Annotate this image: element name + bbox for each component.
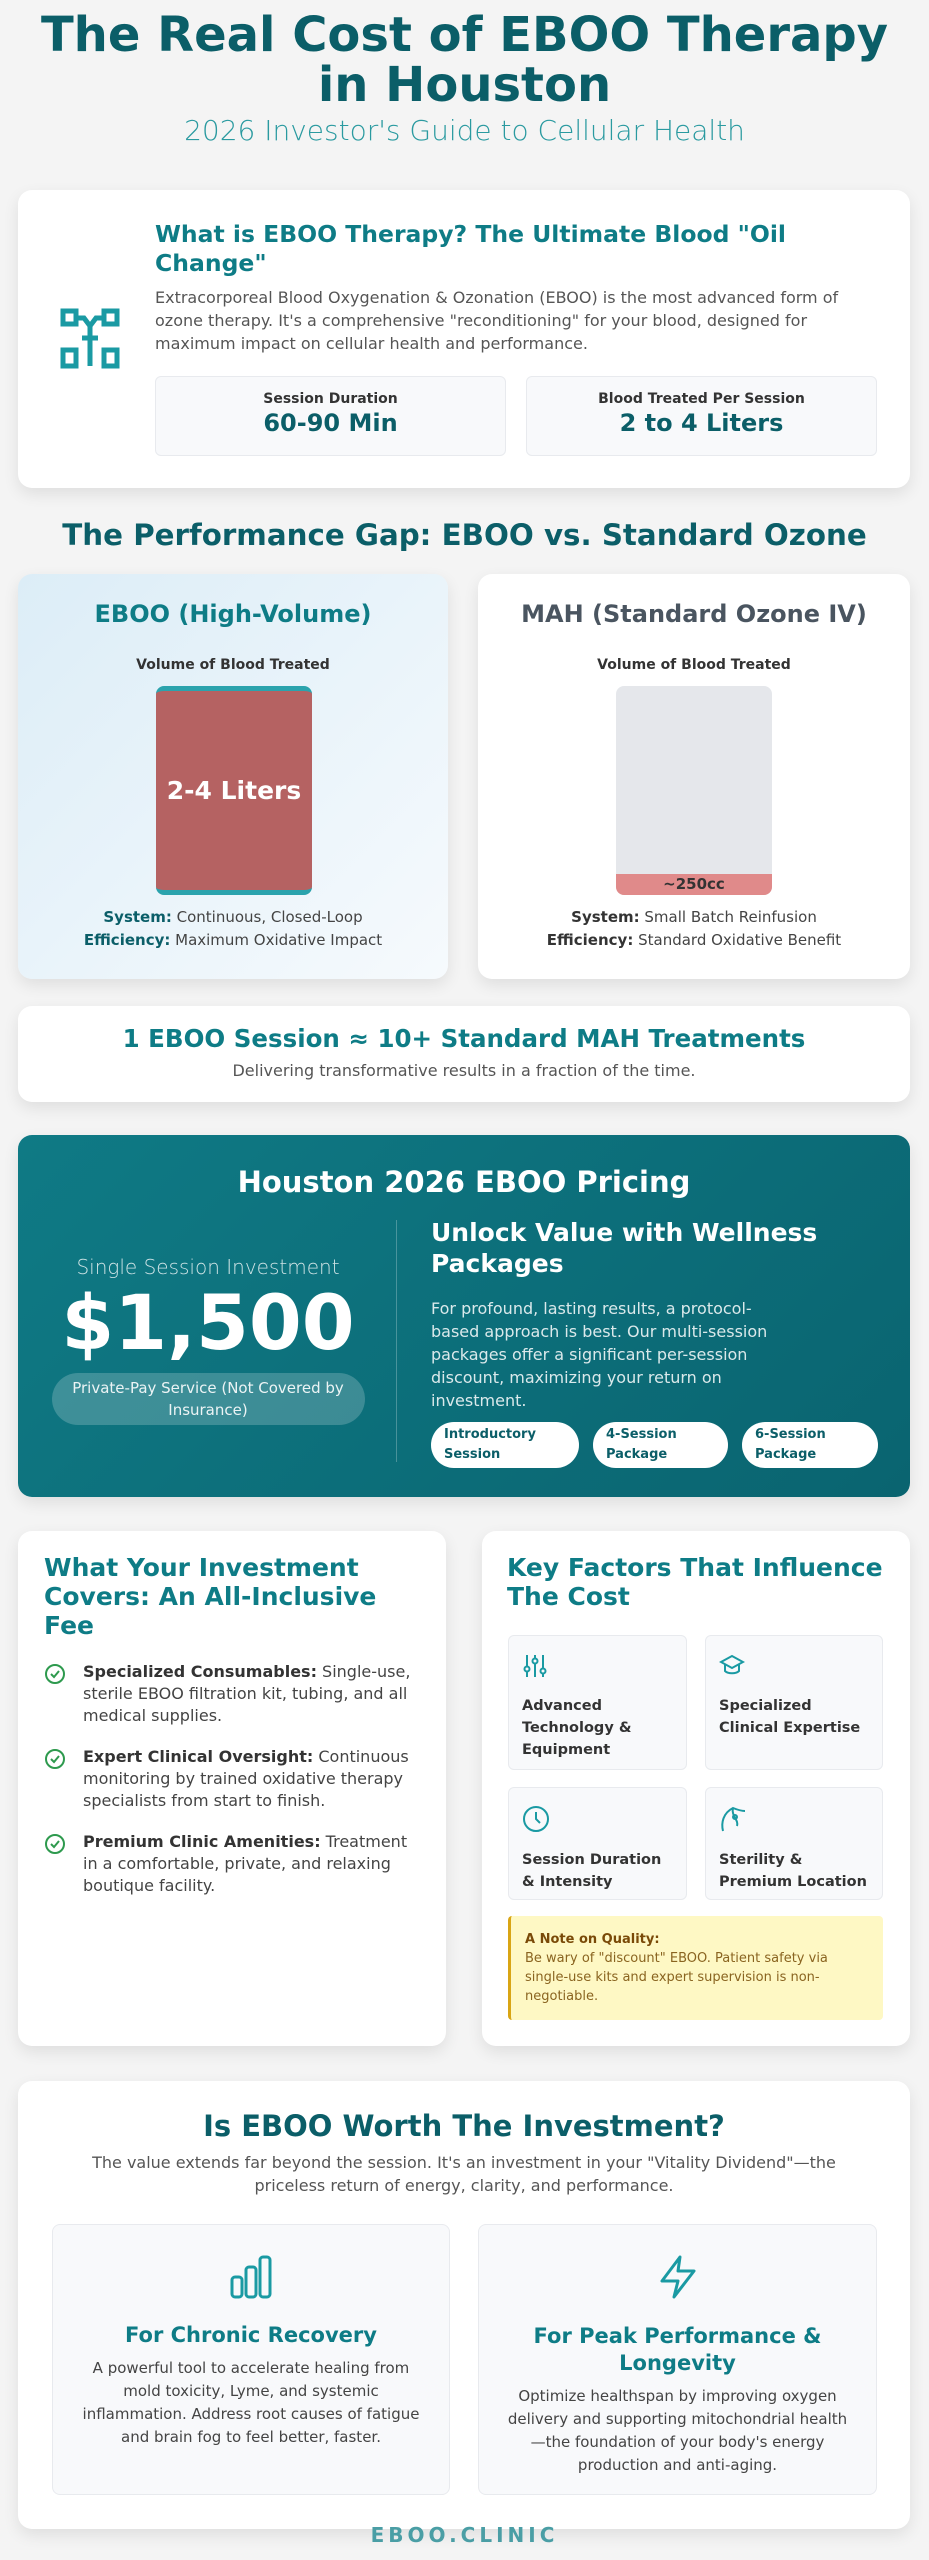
benefit: peak performance: Optimize healthspan by improving oxygen delivery and supporting mitochondrial health—the foundation of your body's energy production and anti-aging. (508, 2387, 847, 2474)
package buttons: Introductory (444, 1427, 536, 1442)
specs: Efficiency: Maximum Oxidative Impact (84, 931, 382, 949)
package buttons: Package (606, 1447, 667, 1462)
factor: technology (508, 1635, 687, 1770)
stat: duration: 60-90 Min (263, 409, 398, 437)
title (41, 7, 888, 113)
bar: 2-4 liters: 2-4 Liters (167, 776, 301, 805)
panel: worth the investment (18, 2081, 910, 2529)
heading: Is EBOO Worth The Investment? (203, 2109, 725, 2143)
factor: expertise: Specialized Clinical Expertise (719, 1698, 860, 1736)
package buttons (431, 1422, 878, 1468)
bar: 250cc (616, 686, 772, 895)
stat: duration (155, 376, 506, 456)
bar: 250cc: ~250cc (663, 875, 725, 893)
stat: duration: Session Duration (263, 391, 398, 407)
panel: key factors (482, 1531, 910, 2046)
panel: what is EBOO (18, 190, 910, 488)
bar: 2-4 liters (156, 686, 312, 895)
panel: investment covers (18, 1531, 446, 2046)
benefit: chronic recovery (52, 2224, 450, 2495)
footer brand: EBOO.CLINIC (371, 2523, 558, 2547)
package buttons: Package (755, 1447, 816, 1462)
benefit: peak performance (478, 2224, 877, 2495)
heading: What Your Investment Covers: An All-Inclusive Fee (44, 1553, 376, 1640)
callout: quality note: Be wary of "discount" EBOO. Patient safety via single-use kits and expert supervision is non-negotiable. (525, 1951, 828, 2004)
subtitle: 2026 Investor's Guide to Cellular Health (184, 114, 745, 147)
heading: Key Factors That Influence The Cost (507, 1553, 883, 1611)
icon: lightning (660, 2256, 696, 2298)
package buttons: 6-Session (755, 1427, 826, 1442)
packages (431, 1218, 878, 1468)
callout: 1 EBOO = 10 MAH: 1 EBOO Session ≈ 10+ Standard MAH Treatments (123, 1024, 805, 1053)
section heading: performance gap: The Performance Gap: EBOO vs. Standard Ozone (62, 518, 867, 552)
insurance pill: Private-Pay Service (Not Covered by Insurance) (72, 1379, 344, 1419)
specs (547, 908, 841, 949)
callout: 1 EBOO = 10 MAH (18, 1006, 910, 1102)
panel: EBOO comparison (18, 574, 448, 979)
stat: blood volume: Blood Treated Per Session (598, 391, 805, 407)
factor: expertise (705, 1635, 883, 1770)
insurance pill (52, 1373, 364, 1425)
price block (52, 1255, 365, 1425)
checklist (45, 1662, 410, 1895)
title: in Houston (318, 57, 611, 113)
item: consumables: Specialized Consumables: Single-use, sterile EBOO filtration kit, tubing, and all medical supplies. (83, 1662, 410, 1725)
specs: Efficiency: Standard Oxidative Benefit (547, 931, 841, 949)
icon: bar chart (230, 2256, 272, 2298)
benefit: peak performance: Longevity (619, 2351, 736, 2375)
description: Extracorporeal Blood Oxygenation & Ozonation (EBOO) is the most advanced form of ozone therapy. It's a comprehensive "reconditioning" for your blood, designed for maximum impact on cellular health and performance. (155, 288, 838, 353)
callout: 1 EBOO = 10 MAH: Delivering transformative results in a fraction of the time. (232, 1061, 696, 1080)
heading: Houston 2026 EBOO Pricing (238, 1165, 690, 1199)
title: The Real Cost of EBOO Therapy (41, 7, 888, 63)
factor: sterility (705, 1787, 883, 1900)
heading: What is EBOO Therapy? The Ultimate Blood "Oil Change" (155, 220, 786, 277)
panel: pricing (18, 1135, 910, 1497)
item: amenities: Premium Clinic Amenities: Treatment in a comfortable, private, and relaxing boutique facility. (83, 1832, 407, 1895)
factor: technology: Advanced Technology & Equipment (522, 1698, 631, 1758)
stat: blood volume: 2 to 4 Liters (620, 409, 783, 437)
item: oversight: Expert Clinical Oversight: Continuous monitoring by trained oxidative therapy specialists from start to finish. (83, 1747, 409, 1810)
panel: MAH comparison (478, 574, 910, 979)
specs: System: Small Batch Reinfusion (571, 908, 817, 926)
divider (396, 1220, 397, 1462)
callout: quality note (508, 1916, 883, 2020)
package buttons: Session (444, 1447, 500, 1462)
benefit: peak performance: For Peak Performance & (534, 2324, 821, 2348)
icon: network (60, 308, 120, 368)
factor: duration (508, 1787, 687, 1900)
price block: $1,500 (61, 1278, 355, 1367)
factor: sterility: Sterility & Premium Location (719, 1852, 867, 1890)
heading: EBOO (High-Volume) (95, 600, 371, 628)
label: Volume of Blood Treated (597, 657, 791, 673)
callout: quality note: A Note on Quality: (525, 1932, 660, 1947)
benefit: chronic recovery: A powerful tool to accelerate healing from mold toxicity, Lyme, and systemic inflammation. Address root causes of fatigue and brain fog to feel better, faster. (83, 2359, 419, 2446)
stat: blood volume (526, 376, 877, 456)
intro text: The value extends far beyond the session. It's an investment in your "Vitality Dividend"—the priceless return of energy, clarity, and performance. (92, 2153, 836, 2195)
label: Volume of Blood Treated (136, 657, 330, 673)
packages: Unlock Value with Wellness Packages (431, 1218, 817, 1278)
specs (84, 908, 382, 949)
package buttons: 4-Session (606, 1427, 677, 1442)
benefit: chronic recovery: For Chronic Recovery (125, 2323, 377, 2347)
heading: MAH (Standard Ozone IV) (521, 600, 867, 628)
factor: duration: Session Duration & Intensity (522, 1852, 661, 1890)
price block: Single Session Investment (76, 1255, 340, 1279)
specs: System: Continuous, Closed-Loop (103, 908, 363, 926)
packages: For profound, lasting results, a protocol-based approach is best. Our multi-session packages offer a significant per-session discount, maximizing your return on investment. (431, 1299, 767, 1410)
